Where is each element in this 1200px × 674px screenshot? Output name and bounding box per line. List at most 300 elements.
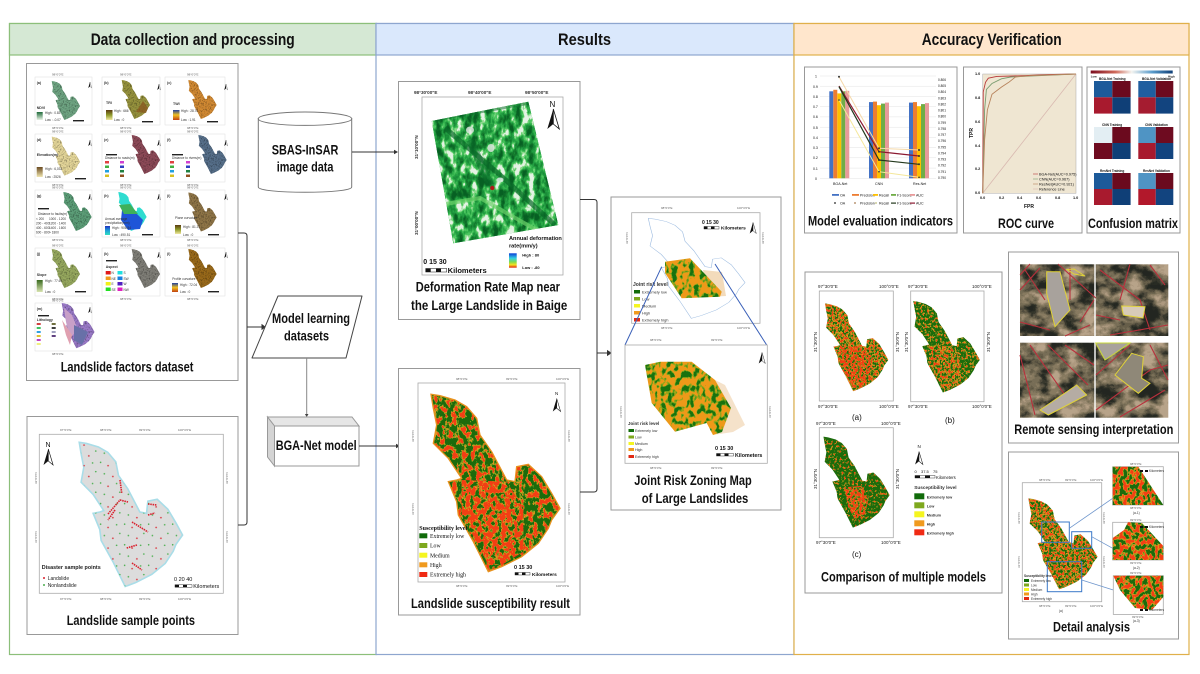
icon: north arrow: N [550,100,556,109]
legend: susceptibility level: Extremely low [430,534,465,540]
factor map m: lithology: (m) [37,307,43,311]
ROC chart: 0.4 [1017,196,1023,200]
coordinate labels [411,377,571,588]
inset map: full region [625,206,765,330]
chart legend: Precision [860,202,875,206]
factor map a: NDVI: Low : -0.07 [45,118,61,122]
zoom connector lines [625,264,767,345]
arrow: BGA-Net to susceptibility [359,444,400,448]
coordinate labels [414,90,549,235]
legend: susceptibility: Extremely high [1031,597,1052,601]
coordinate labels: 31°0'0"N [567,503,571,515]
bar and line chart: 0.795 [938,146,946,150]
factor map j: slope: Slope [37,273,46,277]
title: landslide sample points: Landslide sample points [67,612,195,628]
title: comparison: Comparison of multiple models [821,569,986,585]
scale bar [914,469,956,480]
bar and line chart: CNN [875,182,883,186]
legend: annual deformation: Low : -80 [522,265,540,270]
card: deformation rate map [398,82,580,320]
chart legend: F1-Score [897,194,912,198]
map: susceptibility zoning [431,394,560,572]
matrix: CNN training [1094,123,1131,159]
colour bar [1091,70,1175,78]
factor map e: distance to roads [102,130,161,187]
scale bar [702,220,746,232]
factor map a: NDVI: NDVI [37,106,45,110]
legend: disaster sample points: Nonlandslide [48,583,77,589]
factor map g: distance to faults: 1000 - 1200 [49,217,66,221]
bar and line chart: 0.799 [938,121,946,125]
ROC legend: CNN(AUC=0.967) [1039,178,1070,182]
map a: 31°30'0"N [895,332,900,352]
legend: susceptibility level: Medium [430,553,450,559]
factor map b: 98°0'0"E [120,126,132,130]
inset a-2: (a-2) [1133,566,1140,570]
factor map g: distance to faults: 600 - 800 [36,230,50,234]
ROC chart: 0.0 [975,191,980,195]
factor map b: TRI [106,101,112,105]
heading: data collection: Data collection and processing [91,30,295,49]
legend: joint risk level: Joint risk level [628,421,659,426]
bar and line chart: 0.806 [938,78,946,82]
map c: 97°30'0"E [816,421,836,426]
icon: SBAS-InSAR cylinder: image data [277,159,334,175]
main map a: 99°0'0"E [1065,478,1077,482]
satellite image bottom left [1020,343,1094,418]
chart legend: AUC [916,194,924,198]
main map a: 31°0'0"N [1102,556,1106,568]
legend: susceptibility: Susceptibility level [1024,574,1053,578]
matrix: ResNet training: ResNet Training [1100,169,1124,173]
legend: joint risk level: High [635,448,642,452]
bar and line chart: 0.801 [938,108,946,112]
ROC legend: ResNet(AUC=0.921) [1039,182,1075,186]
matrix: BGA-Net training [1094,77,1131,114]
map a: 100°0'0"E [879,284,899,289]
legend: joint risk level: Low [642,296,649,302]
factor map d: elevation: High : 6,033 [45,167,62,171]
coordinate labels: 32°0'0"N [34,472,38,484]
scale bar: 75 [933,469,938,474]
factor map i: plane curvature: 98°0'0"E [187,186,199,190]
factor map k: aspect [102,244,161,301]
legend: susceptibility [1024,574,1053,601]
ROC legend [1033,172,1077,192]
legend: joint risk level: Medium [635,442,648,446]
bar and line chart: 0.6 [813,115,818,119]
map a [813,284,900,422]
scale bar: 0 20 40 [174,577,192,583]
inset a-3: Kilometers [1149,608,1164,612]
factor map i: plane curvature: High : 81.37 [183,225,200,229]
coordinate labels [34,428,229,601]
factor map c: 98°0'0"E [187,126,199,130]
matrix: BGA-Net validation [1138,77,1173,114]
legend: joint risk level: Extremely high [642,318,668,322]
bar and line chart: 0.800 [938,114,946,118]
inset map: zoomed area [619,338,772,470]
factor map b: 98°0'0"E [120,72,132,76]
icon: north arrow: N [46,442,51,449]
inset map: zoomed area: 98°0'0"E [650,466,662,470]
matrix: BGA-Net validation: BGA-Net Validation [1142,77,1171,81]
factor map a: NDVI: High : 0.83 [45,111,61,115]
legend: annual deformation: rate(mm/y) [509,244,538,250]
coordinate labels: 98°50'00"E [525,90,549,95]
legend: susceptibility level: High [430,563,442,569]
coordinate labels: 100°0'0"E [556,584,569,588]
factor map c [165,72,228,130]
factor map a: NDVI [35,72,92,130]
bar and line chart: 0.792 [938,164,946,168]
main map a: 98°0'0"E [1039,478,1051,482]
chart legend: Recall [879,202,889,206]
title: joint risk zoning [634,472,752,506]
factor map g: distance to faults: > 1800 [49,230,59,234]
factor map k: aspect: NW [124,288,129,292]
legend: susceptibility level: Susceptibility level [914,485,957,490]
title: deformation map [411,279,567,313]
inset a-1 [1113,462,1164,515]
bar and line chart: 0.5 [813,126,818,130]
card: landslide sample points [27,416,238,634]
ROC chart: 0.4 [975,144,981,148]
title: ROC curve: ROC curve [998,215,1054,231]
factor map h: precipitation: 98°0'0"E [120,238,132,242]
legend: susceptibility: Medium [1031,588,1043,592]
factor map i: plane curvature: Low : 0 [183,233,194,237]
map: deformation rate [432,102,558,243]
factor map l: profile curvature: (l) [167,252,171,256]
factor map c: TWI [173,102,180,106]
inset a-2 [1113,518,1164,570]
bar and line chart: 0.790 [938,176,946,180]
title: susceptibility result: Landslide susceptibility result [411,595,570,611]
coordinate labels: 98°0'0"E [456,377,468,381]
legend: susceptibility level: Susceptibility level [419,526,467,532]
inset a-3: (a-3) [1133,619,1140,623]
bar and line chart: 0.7 [813,105,818,109]
chart legend: OA [840,194,846,198]
legend: susceptibility: High [1031,592,1038,596]
map a: 31°30'0"N [813,332,818,352]
legend: susceptibility level: Extremely high [430,573,466,579]
matrix: ResNet validation: ResNet Validation [1143,169,1170,173]
scale bar [514,565,557,578]
legend: susceptibility level: Extremely low [927,496,952,500]
coordinate labels: 98°0'0"E [100,428,112,432]
factor map j: slope [35,244,92,301]
ROC chart [969,72,1078,210]
main map a [1017,478,1106,613]
factor map g: distance to faults: 1200 - 1400 [49,222,66,226]
satellite image top right [1096,264,1168,336]
legend: joint risk level: Extremely high [635,455,659,459]
scale bar: Kilometers [735,453,762,459]
title: confusion matrix: Confusion matrix [1088,215,1178,231]
factor map m: lithology [35,298,95,356]
chart legend: F1-Score [897,202,912,206]
scale bar: Kilometers [936,475,956,480]
factor map h: precipitation: Low : 490.51 [112,233,130,237]
card: comparison of multiple models [805,272,1002,593]
factor map c: (c) [167,81,172,85]
bar and line chart: Res-Net [913,182,926,186]
ROC chart: 0.8 [1055,196,1060,200]
legend: annual deformation: Annual deformation [509,236,562,242]
chart legend [832,194,924,206]
bar and line chart: 0 [815,177,817,181]
coordinate labels: 99°0'0"E [139,428,151,432]
coordinate labels: 31°0'0"N [225,531,229,543]
legend: susceptibility: Extremely low [1031,579,1052,583]
matrix: ResNet training [1094,169,1131,205]
bar and line chart: 0.796 [938,139,946,143]
factor map d: elevation: 98°0'0"E [52,183,64,187]
panel: accuracy verification [794,24,1189,654]
coordinate labels: 31°00'00"N [414,211,419,235]
map c [813,421,901,559]
inset map: zoomed area: 99°0'0"E [711,338,723,342]
ROC legend: Reference Line [1039,188,1065,192]
box: model learning datasets: datasets [284,328,329,344]
coordinate labels: 100°0'0"E [178,597,191,601]
factor map f: distance to rivers: 98°0'0"E [187,183,199,187]
scale bar: Kilometers [721,226,746,232]
bar and line chart: 0.803 [938,96,946,100]
ROC chart: 0.2 [999,196,1004,200]
icon: north arrow [547,100,559,129]
factor map a: NDVI: 98°0'0"E [52,72,64,76]
card: remote sensing interpretation [1008,252,1178,443]
factor map c: 98°0'0"E [187,72,199,76]
title: detail analysis: Detail analysis [1053,619,1130,635]
bar and line chart: 1 [815,74,817,78]
box: BGA-Net model: BGA-Net model [276,437,357,453]
title: joint risk zoning: Joint Risk Zoning Map [634,472,752,488]
factor map g: distance to faults: 200 - 400 [36,222,50,226]
factor map l: profile curvature: Profile curvature [172,277,196,281]
legend: susceptibility level: High [927,522,936,526]
factor map k: aspect: 98°0'0"E [120,297,132,301]
factor map i: plane curvature [165,186,228,242]
legend: joint risk level: Low [635,436,642,440]
factor map b: High : 666 [114,109,129,113]
map b: 31°30'0"N [986,332,991,352]
map c: 97°30'0"E [816,540,836,545]
coordinate labels: 31°0'0"N [34,531,38,543]
main map a: (a) [1059,609,1063,613]
coordinate labels: 98°30'00"E [414,90,438,95]
factor map h: precipitation: High : 906.54 [112,226,131,230]
factor map f: distance to rivers: (f) [167,138,171,142]
legend: disaster sample points: Landslide [48,576,69,582]
chart legend: AUC [916,202,924,206]
factor map k: aspect: 98°0'0"E [120,244,132,248]
factor map g: distance to faults: 1400 - 1600 [49,226,66,230]
map b: 97°30'0"E [908,404,928,409]
satellite image bottom right [1096,343,1168,418]
main map a: 32°0'0"N [1102,512,1106,524]
map a: 100°0'0"E [879,404,899,409]
scale bar: 0 15 30 [514,565,532,571]
ROC chart: FPR [1024,204,1034,210]
factor map k: aspect: (k) [104,252,109,256]
scale bar [715,446,762,459]
map c: 100°0'0"E [881,540,901,545]
colour bar: Low [1091,74,1097,78]
inset a-2: 99°0'0"E [1130,561,1142,565]
factor map k: aspect: W [124,282,127,286]
inset a-1: Kilometers [1149,469,1164,473]
title: joint risk zoning: of Large Landslides [642,490,748,506]
title: deformation map: Deformation Rate Map near [416,279,560,295]
colour bar: High [1168,74,1175,78]
ROC chart: 0.2 [975,167,980,171]
scale bar: Kilometers [448,268,487,275]
factor map k: aspect: E [112,282,114,286]
card: ROC curve [964,67,1082,233]
factor map i: plane curvature: (i) [167,194,171,198]
factor map k: aspect: SW [124,277,129,281]
panel: results [376,24,794,654]
factor map g: distance to faults: 98°0'0"E [52,186,64,190]
factor map d: elevation: (d) [37,138,42,142]
inset a-1: 98°0'0"E [1130,462,1142,466]
legend: susceptibility level: Low [430,544,441,550]
factor map d: elevation: 98°0'0"E [52,130,64,134]
card: joint risk zoning map [611,197,781,510]
scale bar [423,259,487,275]
bar and line chart: 0.793 [938,158,946,162]
factor map k: aspect: Aspect [106,265,118,269]
legend: joint risk level: High [642,310,650,316]
icon: SBAS-InSAR cylinder [258,112,352,192]
coordinate labels: 100°0'0"E [178,428,191,432]
map c: 31°30'0"N [813,469,818,489]
factor map l: profile curvature: 98°0'0"E [187,297,199,301]
legend: joint risk level [633,282,668,322]
inset map: zoomed area: 98°0'0"E [650,338,662,342]
bar and line chart: 0.8 [813,95,818,99]
factor map f: distance to rivers [165,130,228,187]
title: deformation map: the Large Landslide in Baige [411,297,567,313]
map a: 97°30'0"E [818,404,838,409]
scale bar: 37.5 [921,469,930,474]
map: sample points [79,442,183,587]
heading: accuracy verification: Accuracy Verification [922,30,1062,49]
ROC chart: 0.0 [980,196,985,200]
legend: joint risk level: Medium [642,304,657,308]
arrow: SBAS to deformation map [352,150,398,154]
matrix: CNN training: CNN Training [1102,123,1122,127]
bar and line chart: 0.797 [938,133,946,137]
coordinate labels: 32°0'0"N [225,472,229,484]
matrix: CNN validation: CNN Validation [1145,123,1168,127]
map b: 97°30'0"E [908,284,928,289]
factor map b: (b) [104,81,109,85]
factor map k: aspect: S [124,271,126,275]
map b: (b) [945,416,955,425]
bar and line chart: 0.4 [813,136,818,140]
factor map m: lithology: 98°0'0"E [52,352,64,356]
factor map h: precipitation [102,186,161,242]
icon: north arrow [44,442,53,465]
main map a: 100°0'0"E [1090,478,1103,482]
ROC legend: BGA-Net(AUC=0.975) [1039,172,1077,176]
inset map: zoomed area: 99°0'0"E [711,466,723,470]
inset map: full region: 100°0'0"E [737,326,750,330]
card: landslide factors dataset [26,64,238,380]
factor map h: precipitation: (h) [104,194,109,198]
coordinate labels: 32°0'0"N [567,430,571,442]
scale bar [174,577,220,590]
factor map g: distance to faults: Distance to faults(m) [38,212,67,216]
inset map: zoomed area: 31°0'0"N [619,406,623,418]
scale bar: 0 15 30 [702,220,719,226]
main map a: 99°0'0"E [1065,604,1077,608]
matrix: CNN validation [1138,123,1173,159]
box: model learning datasets: Model learning [272,310,350,326]
chart legend: Precision [860,194,875,198]
ROC chart: TPR [969,128,975,138]
icon: north arrow: N [918,444,921,449]
coordinate labels: 97°0'0"E [60,597,72,601]
legend: susceptibility level: Medium [927,514,942,518]
coordinate labels: 99°0'0"E [506,584,518,588]
factor map l: profile curvature: High : 72.04 [180,283,197,287]
factor map d: elevation [35,130,92,187]
inset map: full region: 100°0'0"E [737,206,750,210]
coordinate labels: 98°0'0"E [100,597,112,601]
ROC chart: 0.6 [975,120,980,124]
bar and line chart: 0.1 [813,167,818,171]
card: confusion matrix [1087,67,1180,233]
factor map k: aspect: NE [112,277,116,281]
main map a: 31°0'0"N [1017,556,1021,568]
factor map l: profile curvature: Low : 0 [180,290,191,294]
inset a-3: 99°0'0"E [1132,615,1144,619]
arrow: results bracket to joint risk map [580,200,611,492]
bar and line chart: 0.9 [813,85,818,89]
main map a: 98°0'0"E [1039,604,1051,608]
map a: 97°30'0"E [818,284,838,289]
factor map e: distance to roads: 98°0'0"E [120,183,132,187]
factor map e: distance to roads: (e) [104,138,109,142]
factor map j: slope: (j) [37,252,41,256]
inset a-2: 99°0'0"E [1130,518,1142,522]
factor map i: plane curvature: Plane curvature [175,216,198,220]
factor map a: NDVI: (a) [37,81,42,85]
main map a: 100°0'0"E [1090,604,1103,608]
factor map g: distance to faults [35,186,92,242]
icon: north arrow [915,444,923,464]
factor map e: distance to roads: Distance to roads(m) [105,156,135,160]
legend: susceptibility: Low [1031,584,1038,588]
satellite image top left [1020,264,1098,336]
ROC chart: 0.8 [975,96,980,100]
legend: disaster sample points: Disaster sample points [42,565,101,571]
inset a-1: 98°0'0"E [1130,506,1142,510]
factor map b [102,72,161,130]
icon: SBAS-InSAR cylinder: SBAS-InSAR [272,141,338,157]
factor map g: distance to faults: < 200 [36,217,44,221]
factor map l: profile curvature [165,244,228,301]
factor map g: distance to faults: 400 - 600 [36,226,50,230]
matrix: ResNet validation [1138,169,1173,205]
coordinate labels: 99°0'0"E [139,597,151,601]
